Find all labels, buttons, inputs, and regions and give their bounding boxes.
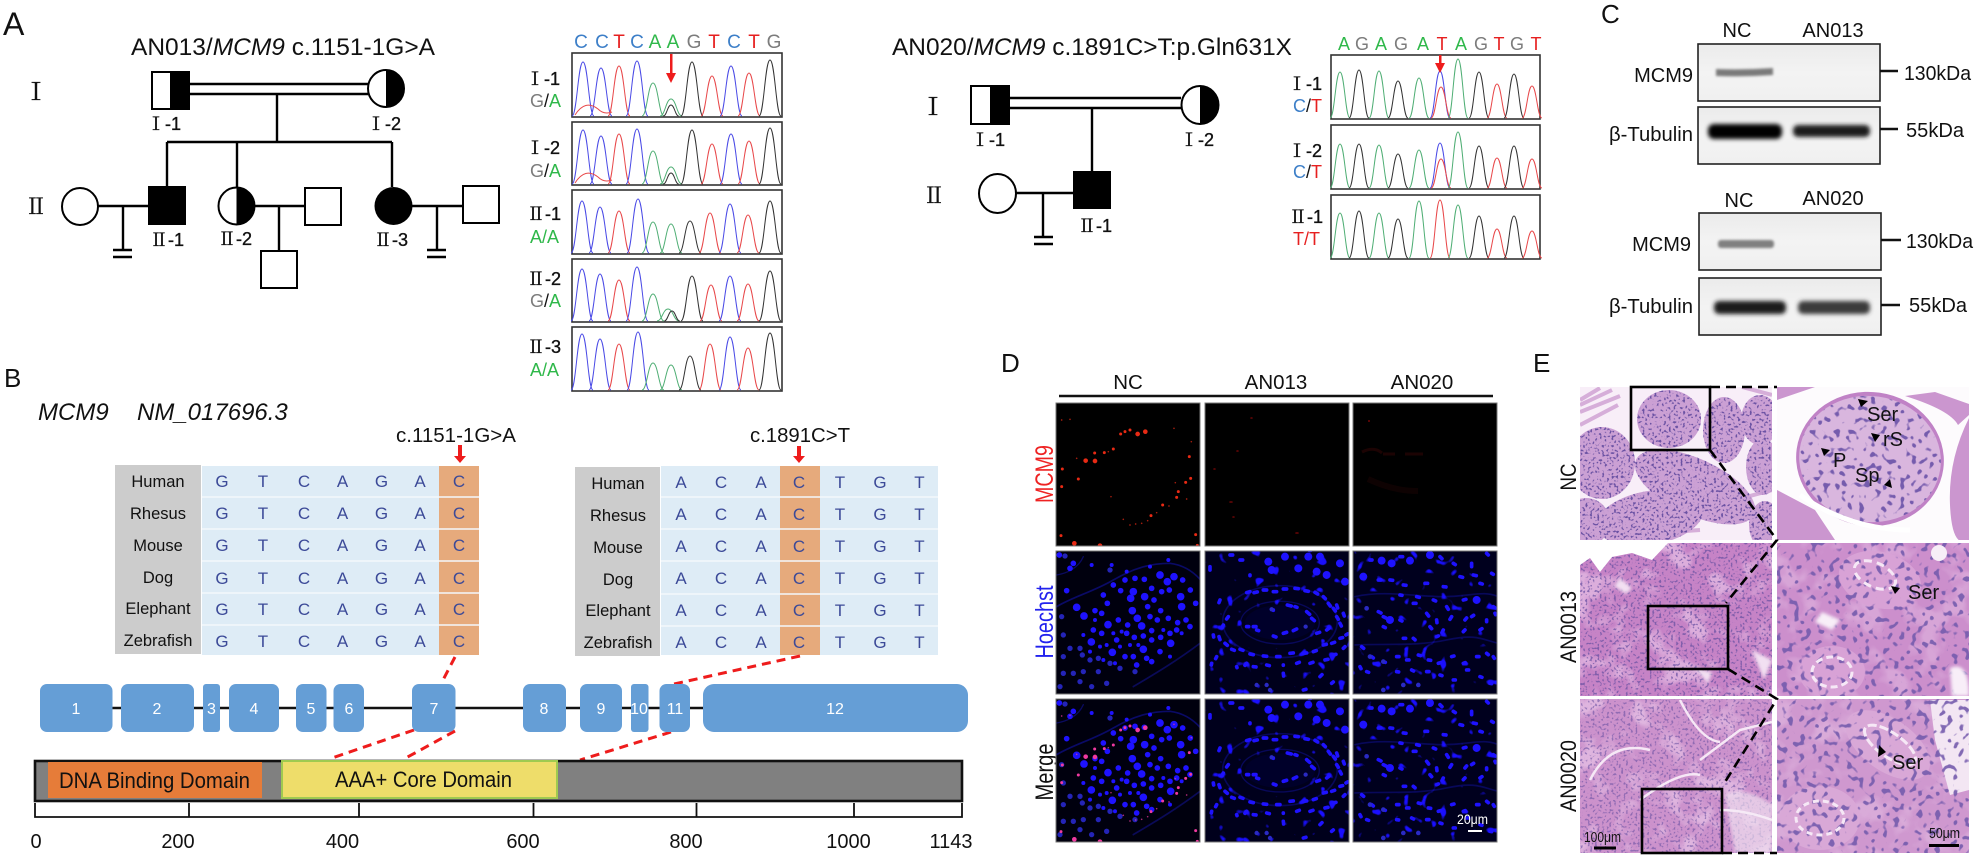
conservation table 1: T: [258, 504, 268, 523]
conservation table 1: G: [375, 632, 388, 651]
conservation table 2: Zebrafish: [584, 634, 652, 652]
image: Hoechst AN020: [1353, 551, 1498, 694]
conservation table 1: C: [453, 536, 465, 555]
conservation table 2: G: [873, 601, 887, 620]
protein domain bar: [35, 761, 962, 801]
panel letter A: A: [3, 6, 25, 42]
gene exon diagram: 1: [72, 701, 81, 718]
variant label c.1151-1G>A: c.1151-1G>A: [396, 425, 517, 447]
sequence letters AN013: C: [630, 32, 644, 53]
conservation table 2: A: [675, 633, 687, 652]
conservation table 1: G: [375, 536, 388, 555]
sequence letters AN020: A: [1375, 34, 1387, 54]
conservation table 2: G: [873, 473, 887, 492]
conservation table 1: [115, 465, 479, 655]
conservation table 1: G: [375, 600, 388, 619]
panel A: pedigrees and sequencing: [3, 6, 1542, 391]
image: Merge AN020: [1353, 699, 1498, 842]
sample labels AN013: Ⅰ-1: [526, 69, 560, 89]
cell annotations: Ser: [1892, 752, 1923, 774]
sequence letters AN020: G: [1474, 34, 1488, 54]
conservation table 2: T: [914, 505, 925, 524]
image: Hoechst NC: [1056, 551, 1201, 694]
conservation table 2: G: [873, 537, 887, 556]
sequence letters AN020: T: [1494, 34, 1504, 54]
generation labels AN020: Ⅱ-1: [1078, 216, 1112, 236]
conservation table 2: T: [914, 473, 925, 492]
sequence letters AN013: A: [649, 32, 662, 53]
generation labels: Ⅰ-1: [147, 114, 181, 134]
protein domain bar: AAA+ Core Domain: [335, 767, 512, 792]
image: Merge NC: [1056, 699, 1201, 842]
red arrow left: [454, 445, 466, 463]
sequence letters AN013: C: [727, 32, 741, 53]
conservation table 2: Rhesus: [590, 507, 646, 525]
conservation table 1: T: [258, 472, 268, 491]
zoom connector dashes: [1710, 387, 1777, 853]
sequence letters AN020: A: [1417, 34, 1429, 54]
size markers bottom: 55kDa: [1909, 295, 1968, 317]
conservation table 1: A: [337, 569, 349, 588]
conservation table 1: G: [215, 600, 229, 619]
title: AN013: AN013/MCM9 c.1151-1G>A: [131, 34, 436, 61]
sample labels AN020: T/T: [1293, 229, 1320, 249]
amino acid ruler: 200: [161, 831, 195, 853]
conservation table 1: Elephant: [125, 600, 191, 618]
generation labels AN020: Ⅰ-2: [1180, 130, 1214, 150]
conservation table 1: Human: [131, 473, 185, 491]
conservation table 2: C: [793, 601, 805, 620]
generation labels AN020: Ⅰ-1: [971, 130, 1005, 150]
size markers top: 130kDa: [1904, 63, 1972, 85]
conservation table 1: C: [298, 600, 310, 619]
conservation table 1: A: [414, 632, 426, 651]
conservation table 2: A: [675, 473, 687, 492]
blot tubulin AN013: [1698, 107, 1880, 164]
conservation table 2: A: [755, 537, 767, 556]
row label AN0013: AN0013: [1556, 591, 1581, 663]
sample labels AN013: [526, 69, 561, 380]
sample labels AN013: A/A: [530, 227, 559, 247]
conservation table 2: C: [715, 537, 727, 556]
conservation table 1: Mouse: [133, 537, 183, 555]
conservation table 1: A: [414, 600, 426, 619]
column headers bottom: [1725, 188, 1864, 212]
conservation table 1: Rhesus: [130, 505, 186, 523]
conservation table 2: Human: [591, 475, 645, 493]
conservation table 2: C: [793, 473, 805, 492]
sequence letters AN013: T: [613, 32, 625, 53]
conservation table 1: A: [414, 569, 426, 588]
conservation table 2: C: [793, 505, 805, 524]
conservation table 1: G: [375, 569, 388, 588]
column headers top: NC: [1723, 20, 1751, 42]
sequence letters AN020: T: [1530, 34, 1542, 54]
conservation table 1: A: [337, 504, 349, 523]
conservation table 1: G: [215, 472, 229, 491]
sequence letters AN020: [1338, 34, 1542, 54]
scale bar 50 um: 50μm: [1929, 826, 1960, 842]
conservation table 2: T: [914, 633, 925, 652]
sample labels AN020: [1288, 74, 1323, 249]
conservation table 2: C: [793, 537, 805, 556]
amino acid ruler: 600: [506, 831, 540, 853]
conservation table 2: Dog: [603, 571, 633, 589]
generation labels: Ⅱ-2: [218, 229, 252, 249]
column headers top: [1723, 20, 1864, 42]
conservation table 2: A: [675, 601, 687, 620]
sample labels AN020: Ⅰ-2: [1288, 141, 1322, 161]
gene exon diagram: 7: [430, 701, 439, 718]
panel C: western blots: [1601, 0, 1974, 335]
row label Merge: Merge: [1031, 744, 1059, 800]
cell annotations: Sp: [1855, 465, 1879, 487]
generation labels: Ⅱ: [25, 194, 47, 219]
column headers: [1113, 371, 1453, 394]
sequence letters AN020: A: [1455, 34, 1467, 54]
gene exon diagram: 10: [630, 701, 648, 718]
conservation table 1: A: [414, 536, 426, 555]
conservation table 2: A: [755, 633, 767, 652]
column headers bottom: AN020: [1802, 188, 1864, 210]
sample labels AN020: Ⅱ-1: [1289, 207, 1323, 227]
gene exon diagram: 5: [307, 701, 316, 718]
zoom boxes: [1631, 387, 1728, 853]
sequence letters AN020: G: [1355, 34, 1369, 54]
column headers: AN020: [1391, 371, 1453, 394]
conservation table 1: A: [414, 472, 426, 491]
sequence letters AN013: C: [574, 32, 588, 53]
conservation table 2: C: [715, 473, 727, 492]
blot labels bottom: [1609, 234, 1693, 318]
amino acid ruler: 400: [326, 831, 359, 853]
conservation table 2: Elephant: [585, 602, 651, 620]
size markers top: 55kDa: [1906, 120, 1965, 142]
conservation table 1: T: [258, 569, 268, 588]
conservation table 1: C: [298, 472, 310, 491]
title: AN020: AN020/MCM9 c.1891C>T:p.Gln631X: [892, 34, 1292, 61]
conservation table 1: A: [337, 632, 349, 651]
conservation table 2: A: [675, 569, 687, 588]
conservation table 1: C: [453, 600, 465, 619]
conservation table 2: T: [835, 633, 845, 652]
panel E: histology: [1533, 348, 1969, 853]
conservation table 2: C: [793, 569, 805, 588]
conservation table 1: C: [298, 536, 310, 555]
red arrow AN013: [666, 54, 676, 83]
sample labels AN020: Ⅰ-1: [1288, 74, 1322, 94]
conservation table 2: T: [914, 537, 925, 556]
conservation table 2: G: [873, 569, 887, 588]
conservation table 2: T: [835, 473, 845, 492]
sequence letters AN020: A: [1338, 34, 1350, 54]
conservation table 1: Zebrafish: [124, 632, 192, 650]
row label NC: NC: [1556, 463, 1581, 490]
sample labels AN013: A/A: [530, 360, 559, 380]
image: NC high magnification: [1777, 382, 1969, 542]
panel D: immunofluorescence: [1001, 348, 1498, 842]
conservation table 2: C: [715, 505, 727, 524]
gene exon diagram: 8: [540, 701, 549, 718]
conservation table 1: G: [375, 504, 388, 523]
conservation table 2: G: [873, 633, 887, 652]
column headers bottom: NC: [1725, 190, 1753, 212]
cell annotations: Ser: [1867, 404, 1898, 426]
image: AN0013 low magnification: [1580, 543, 1772, 696]
sequence letters AN020: G: [1394, 34, 1408, 54]
conservation table 1: C: [298, 569, 310, 588]
conservation table 1: G: [215, 504, 229, 523]
gene exon diagram: 2: [153, 701, 162, 718]
size markers bottom: [1881, 231, 1974, 317]
blot tubulin AN020: [1699, 278, 1881, 335]
conservation table 2: C: [715, 633, 727, 652]
sequence letters AN013: A: [667, 32, 680, 53]
red arrow AN020: [1435, 55, 1445, 73]
panel letter E: E: [1533, 348, 1550, 378]
conservation table 2: T: [914, 569, 925, 588]
conservation table 1: G: [215, 632, 229, 651]
red arrow right: [793, 446, 805, 463]
sample labels AN013: Ⅰ-2: [526, 138, 560, 158]
gene exon diagram: 9: [597, 701, 606, 718]
row label Hoechst: Hoechst: [1031, 585, 1059, 658]
conservation table 2: T: [835, 537, 845, 556]
conservation table 2: G: [873, 505, 887, 524]
gene exon diagram: 3: [207, 701, 216, 718]
protein domain bar: DNA Binding Domain: [59, 768, 250, 793]
variant label c.1891C>T: c.1891C>T: [750, 425, 850, 447]
conservation table 1: T: [258, 536, 268, 555]
conservation table 2: C: [715, 569, 727, 588]
gene and transcript label: MCM9: [38, 399, 109, 426]
generation labels: Ⅱ-3: [374, 230, 408, 250]
sample labels AN013: G/A: [530, 91, 561, 111]
blot labels bottom: β-Tubulin: [1609, 296, 1693, 318]
cell annotations: rS: [1883, 429, 1903, 451]
amino acid ruler: 0: [30, 831, 42, 853]
conservation table 1: C: [453, 569, 465, 588]
size markers top: [1880, 63, 1972, 142]
conservation table 1: A: [337, 536, 349, 555]
conservation table 1: T: [258, 600, 268, 619]
generation labels: Ⅰ-2: [367, 114, 401, 134]
size markers bottom: 130kDa: [1906, 231, 1974, 253]
generation labels: Ⅱ-1: [150, 230, 184, 250]
image: MCM9 NC: [1056, 403, 1200, 546]
chromatogram traces AN013: [571, 60, 781, 390]
conservation table 2: A: [755, 473, 767, 492]
sample labels AN013: Ⅱ-1: [527, 204, 561, 224]
sequence letters AN013: T: [748, 32, 760, 53]
blot labels top: β-Tubulin: [1609, 124, 1693, 146]
conservation table 1: Dog: [143, 569, 173, 587]
conservation table 1: A: [337, 472, 349, 491]
annotation arrowheads: [1821, 399, 1900, 757]
image: NC low magnification: [1580, 387, 1772, 540]
scale bar 100 um: 100μm: [1584, 830, 1621, 846]
conservation table 1: G: [375, 472, 388, 491]
conservation table 2: T: [835, 569, 845, 588]
conservation table 2: T: [835, 505, 845, 524]
generation labels: [24, 79, 408, 250]
pedigree: AN020 family: [971, 86, 1218, 244]
sequence letters AN013: G: [767, 32, 781, 53]
blot labels top: MCM9: [1634, 65, 1693, 87]
conservation table 1: C: [453, 472, 465, 491]
panel letter B: B: [4, 363, 21, 393]
cell annotations: P: [1833, 450, 1846, 472]
sample labels AN013: Ⅱ-3: [527, 337, 561, 357]
column headers: NC: [1113, 371, 1143, 394]
header rule: [1059, 395, 1493, 397]
conservation table 1: G: [215, 569, 229, 588]
conservation table 2: [575, 466, 938, 656]
amino acid ruler: [30, 803, 973, 853]
conservation table 2: A: [675, 505, 687, 524]
conservation table 1: C: [453, 632, 465, 651]
sequence letters AN020: T: [1436, 34, 1448, 54]
gene exon diagram: [40, 684, 968, 732]
conservation table 2: Mouse: [593, 539, 643, 557]
scale bar 20 um: 20μm: [1457, 811, 1488, 827]
conservation table 2: A: [675, 537, 687, 556]
gene exon diagram: 6: [345, 701, 354, 718]
sequence letters AN013: G: [687, 32, 701, 53]
conservation table 2: A: [755, 569, 767, 588]
conservation table 2: A: [755, 505, 767, 524]
conservation table 2: T: [914, 601, 925, 620]
conservation table 1: T: [258, 632, 268, 651]
image: AN0020 high magnification: [1777, 696, 1969, 853]
blot labels bottom: MCM9: [1632, 234, 1691, 256]
panel B: conservation and gene structure: [4, 363, 973, 853]
conservation table 1: C: [298, 504, 310, 523]
image: AN0020 low magnification: [1580, 699, 1772, 853]
panel borders: [1056, 403, 1497, 842]
image: Merge AN013: [1205, 696, 1349, 842]
chromatogram traces AN020: [1330, 59, 1542, 258]
conservation table 2: T: [835, 601, 845, 620]
row label AN0020: AN0020: [1556, 740, 1581, 812]
conservation table 1: G: [215, 536, 229, 555]
sequence letters AN020: G: [1510, 34, 1524, 54]
sequence letters AN013: [574, 32, 781, 53]
conservation table 1: A: [414, 504, 426, 523]
sample labels AN013: Ⅱ-2: [527, 269, 561, 289]
pedigree: AN013 family: [62, 70, 499, 288]
blot MCM9 AN020: [1699, 213, 1881, 270]
amino acid ruler: 800: [669, 831, 703, 853]
gene exon diagram: 4: [250, 701, 259, 718]
connector dashes: [332, 656, 800, 760]
cell annotations: Ser: [1908, 582, 1939, 604]
conservation table 2: C: [715, 601, 727, 620]
image: AN0013 high magnification: [1777, 542, 1969, 698]
gene exon diagram: 11: [667, 701, 683, 718]
column headers top: AN013: [1802, 20, 1864, 42]
panel letter D: D: [1001, 348, 1020, 378]
generation labels: Ⅰ: [24, 79, 48, 106]
generation labels AN020: [921, 94, 1214, 236]
conservation table 2: C: [793, 633, 805, 652]
conservation table 2: A: [755, 601, 767, 620]
sequence letters AN013: C: [595, 32, 609, 53]
cell annotations: [1833, 404, 1939, 774]
sample labels AN013: G/A: [530, 161, 561, 181]
conservation table 1: A: [337, 600, 349, 619]
conservation table 1: C: [453, 504, 465, 523]
amino acid ruler: 1143: [929, 831, 973, 853]
amino acid ruler: 1000: [826, 831, 871, 853]
sequence letters AN013: T: [708, 32, 720, 53]
sample labels AN013: G/A: [530, 291, 561, 311]
blot labels top: [1609, 65, 1693, 146]
column headers: AN013: [1245, 371, 1307, 394]
blot MCM9 AN013: [1698, 44, 1880, 101]
sample labels AN020: C/T: [1293, 96, 1322, 116]
image: MCM9 AN013: [1205, 403, 1349, 546]
image: Hoechst AN013: [1205, 548, 1349, 694]
sample labels AN020: C/T: [1293, 162, 1322, 182]
conservation table 1: C: [298, 632, 310, 651]
generation labels AN020: Ⅰ: [921, 94, 945, 121]
chromatogram frames AN020: [1331, 55, 1540, 259]
image: MCM9 AN020: [1353, 403, 1497, 546]
gene exon diagram: 12: [826, 701, 844, 718]
chromatogram frames AN013: [572, 53, 782, 391]
row label MCM9: MCM9: [1031, 445, 1059, 503]
generation labels AN020: Ⅱ: [923, 183, 945, 208]
gene and transcript label: NM_017696.3: [137, 399, 288, 426]
